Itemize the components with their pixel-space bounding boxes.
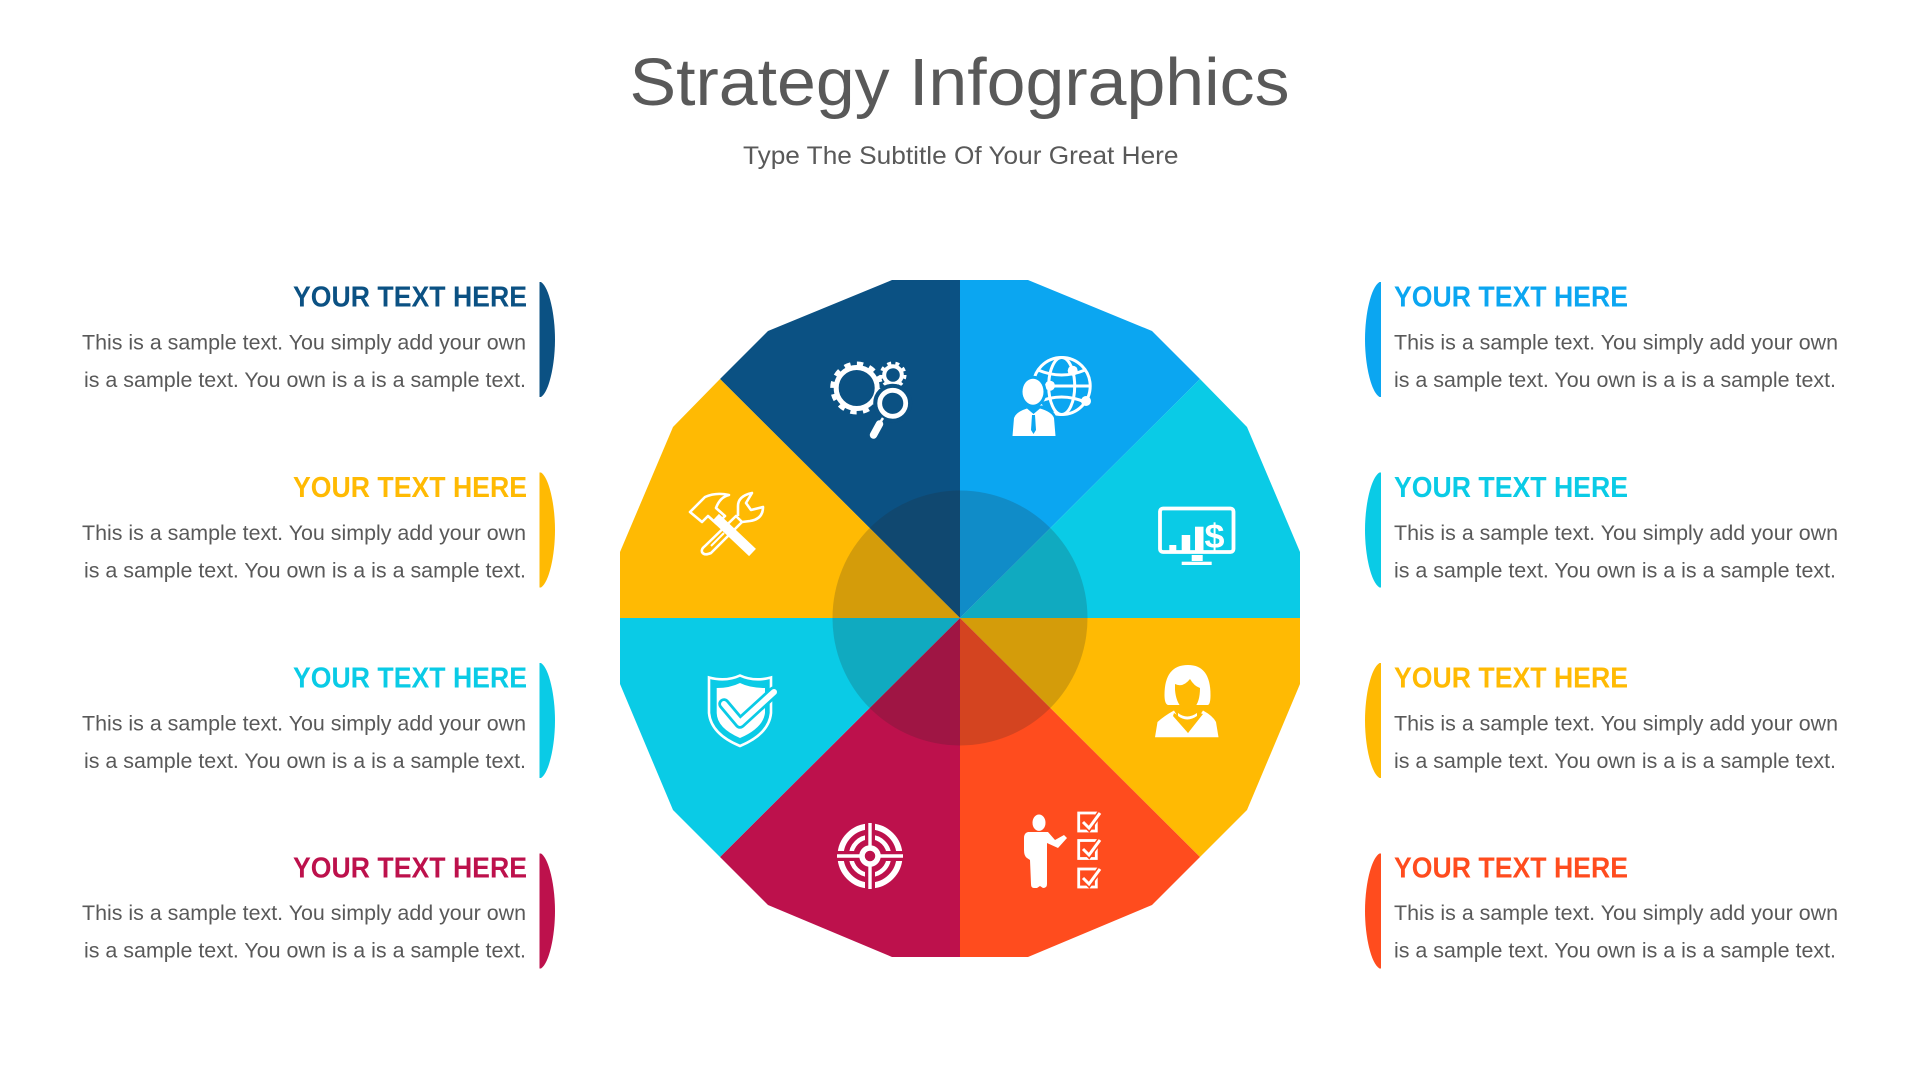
panel: right item 3 (1365, 662, 1838, 778)
icon: presenter with checklist (1024, 813, 1100, 888)
accent bar (1365, 282, 1381, 397)
icon: hammer and wrench (690, 493, 763, 554)
heading: YOUR TEXT HERE (293, 472, 527, 504)
polygon wheel chart (620, 280, 1300, 957)
body text: This is a sample text. You simply add your own (1394, 330, 1838, 354)
panel: left item 3 (82, 662, 555, 778)
body text line 2: is a sample text. You own is a is a sample text. (1394, 368, 1836, 392)
heading: YOUR TEXT HERE (1394, 662, 1628, 694)
body text line 2: is a sample text. You own is a is a sample text. (84, 749, 526, 773)
segment: navy (720, 280, 960, 618)
body text line 2: is a sample text. You own is a is a sample text. (84, 368, 526, 392)
panel: right item 2 (1365, 472, 1838, 588)
segment: sky blue (960, 280, 1200, 618)
segment: amber right (960, 618, 1300, 857)
body text: This is a sample text. You simply add your own (82, 901, 526, 925)
segment: cyan right (960, 379, 1300, 618)
panel: left item 4 (82, 852, 555, 968)
body text line 2: is a sample text. You own is a is a sample text. (1394, 558, 1836, 582)
heading: YOUR TEXT HERE (1394, 282, 1628, 314)
heading: YOUR TEXT HERE (293, 852, 527, 884)
body text: This is a sample text. You simply add your own (1394, 521, 1838, 545)
accent bar (1365, 472, 1381, 588)
body text: This is a sample text. You simply add your own (82, 712, 526, 736)
icon: shield with check (709, 676, 774, 746)
accent bar (540, 282, 555, 397)
segment: cyan left (620, 618, 960, 857)
accent bar (540, 854, 555, 968)
body text: This is a sample text. You simply add your own (1394, 901, 1838, 925)
panel: right item 1 (1365, 282, 1838, 397)
icon: person with globe (1012, 358, 1091, 437)
center translucent circle (832, 490, 1088, 746)
body text line 2: is a sample text. You own is a is a sample text. (1394, 938, 1836, 962)
icon: monitor with dollar chart (1160, 508, 1234, 565)
icon: monitor with dollar chart: $ (1204, 518, 1225, 556)
body text: This is a sample text. You simply add your own (82, 330, 526, 354)
body text: This is a sample text. You simply add your own (1394, 712, 1838, 736)
segment: orange (960, 618, 1200, 957)
segment: crimson (720, 618, 960, 957)
body text line 2: is a sample text. You own is a is a sample text. (1394, 749, 1836, 773)
accent bar (1365, 663, 1381, 778)
segment: amber left (620, 379, 960, 618)
title: Strategy Infographics (630, 45, 1290, 120)
panel: left item 2 (82, 472, 555, 588)
body text: This is a sample text. You simply add your own (82, 521, 526, 545)
accent bar (540, 472, 555, 588)
panel: left item 1 (82, 282, 555, 397)
icon: target (834, 820, 906, 892)
accent bar (1365, 854, 1381, 968)
accent bar (540, 663, 555, 778)
body text line 2: is a sample text. You own is a is a sample text. (84, 938, 526, 962)
heading: YOUR TEXT HERE (1394, 472, 1628, 504)
body text line 2: is a sample text. You own is a is a sample text. (84, 558, 526, 582)
icon: gears and magnifier (832, 363, 909, 435)
subtitle: Type The Subtitle Of Your Great Here (743, 142, 1178, 170)
panel: right item 4 (1365, 852, 1838, 968)
icon: woman avatar (1155, 665, 1218, 737)
heading: YOUR TEXT HERE (293, 282, 527, 314)
heading: YOUR TEXT HERE (1394, 852, 1628, 884)
heading: YOUR TEXT HERE (293, 662, 527, 694)
